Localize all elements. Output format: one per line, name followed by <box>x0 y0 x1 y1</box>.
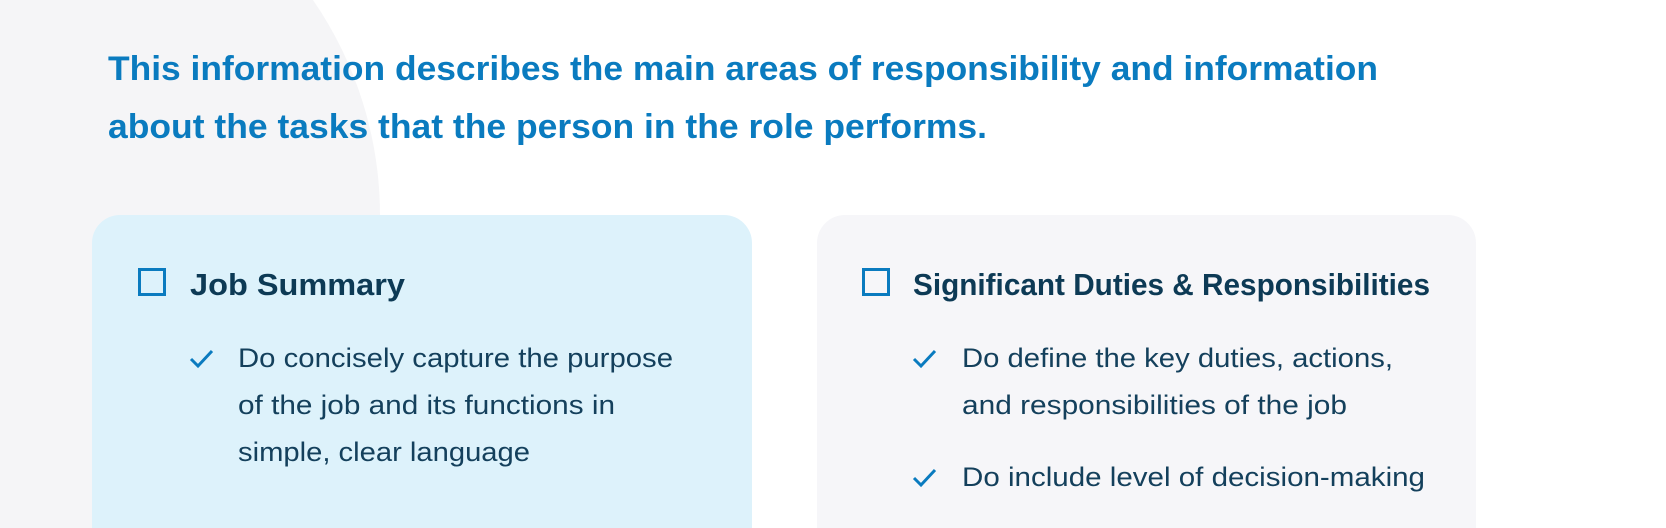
text block: summary item <box>238 343 673 467</box>
text block: summary item: Do concisely capture the purpose <box>238 343 673 373</box>
heading: job summary: Job Summary <box>190 267 406 302</box>
title: This information describes the main areas of responsibility and information <box>108 50 1378 88</box>
text block: duties item 1: Do define the key duties, actions, <box>962 343 1393 373</box>
icon: checkbox <box>140 270 164 294</box>
icon: checkbox <box>864 270 888 294</box>
panel: duties <box>817 215 1476 528</box>
text block: duties item 1 <box>962 343 1393 420</box>
title: about the tasks that the person in the role performs. <box>108 108 987 146</box>
text block: summary item: simple, clear language <box>238 437 530 467</box>
panel: job summary <box>92 215 752 528</box>
text block: duties item 1: and responsibilities of the job <box>962 390 1347 420</box>
title <box>108 50 1378 146</box>
heading: duties: Significant Duties & Responsibilities <box>913 267 1430 302</box>
icon: check <box>191 351 212 366</box>
icon: check 2 <box>914 470 935 485</box>
text block: summary item: of the job and its functions in <box>238 390 615 420</box>
text block: duties item 2: Do include level of decision-making <box>962 462 1425 492</box>
icon: check 1 <box>914 351 935 366</box>
